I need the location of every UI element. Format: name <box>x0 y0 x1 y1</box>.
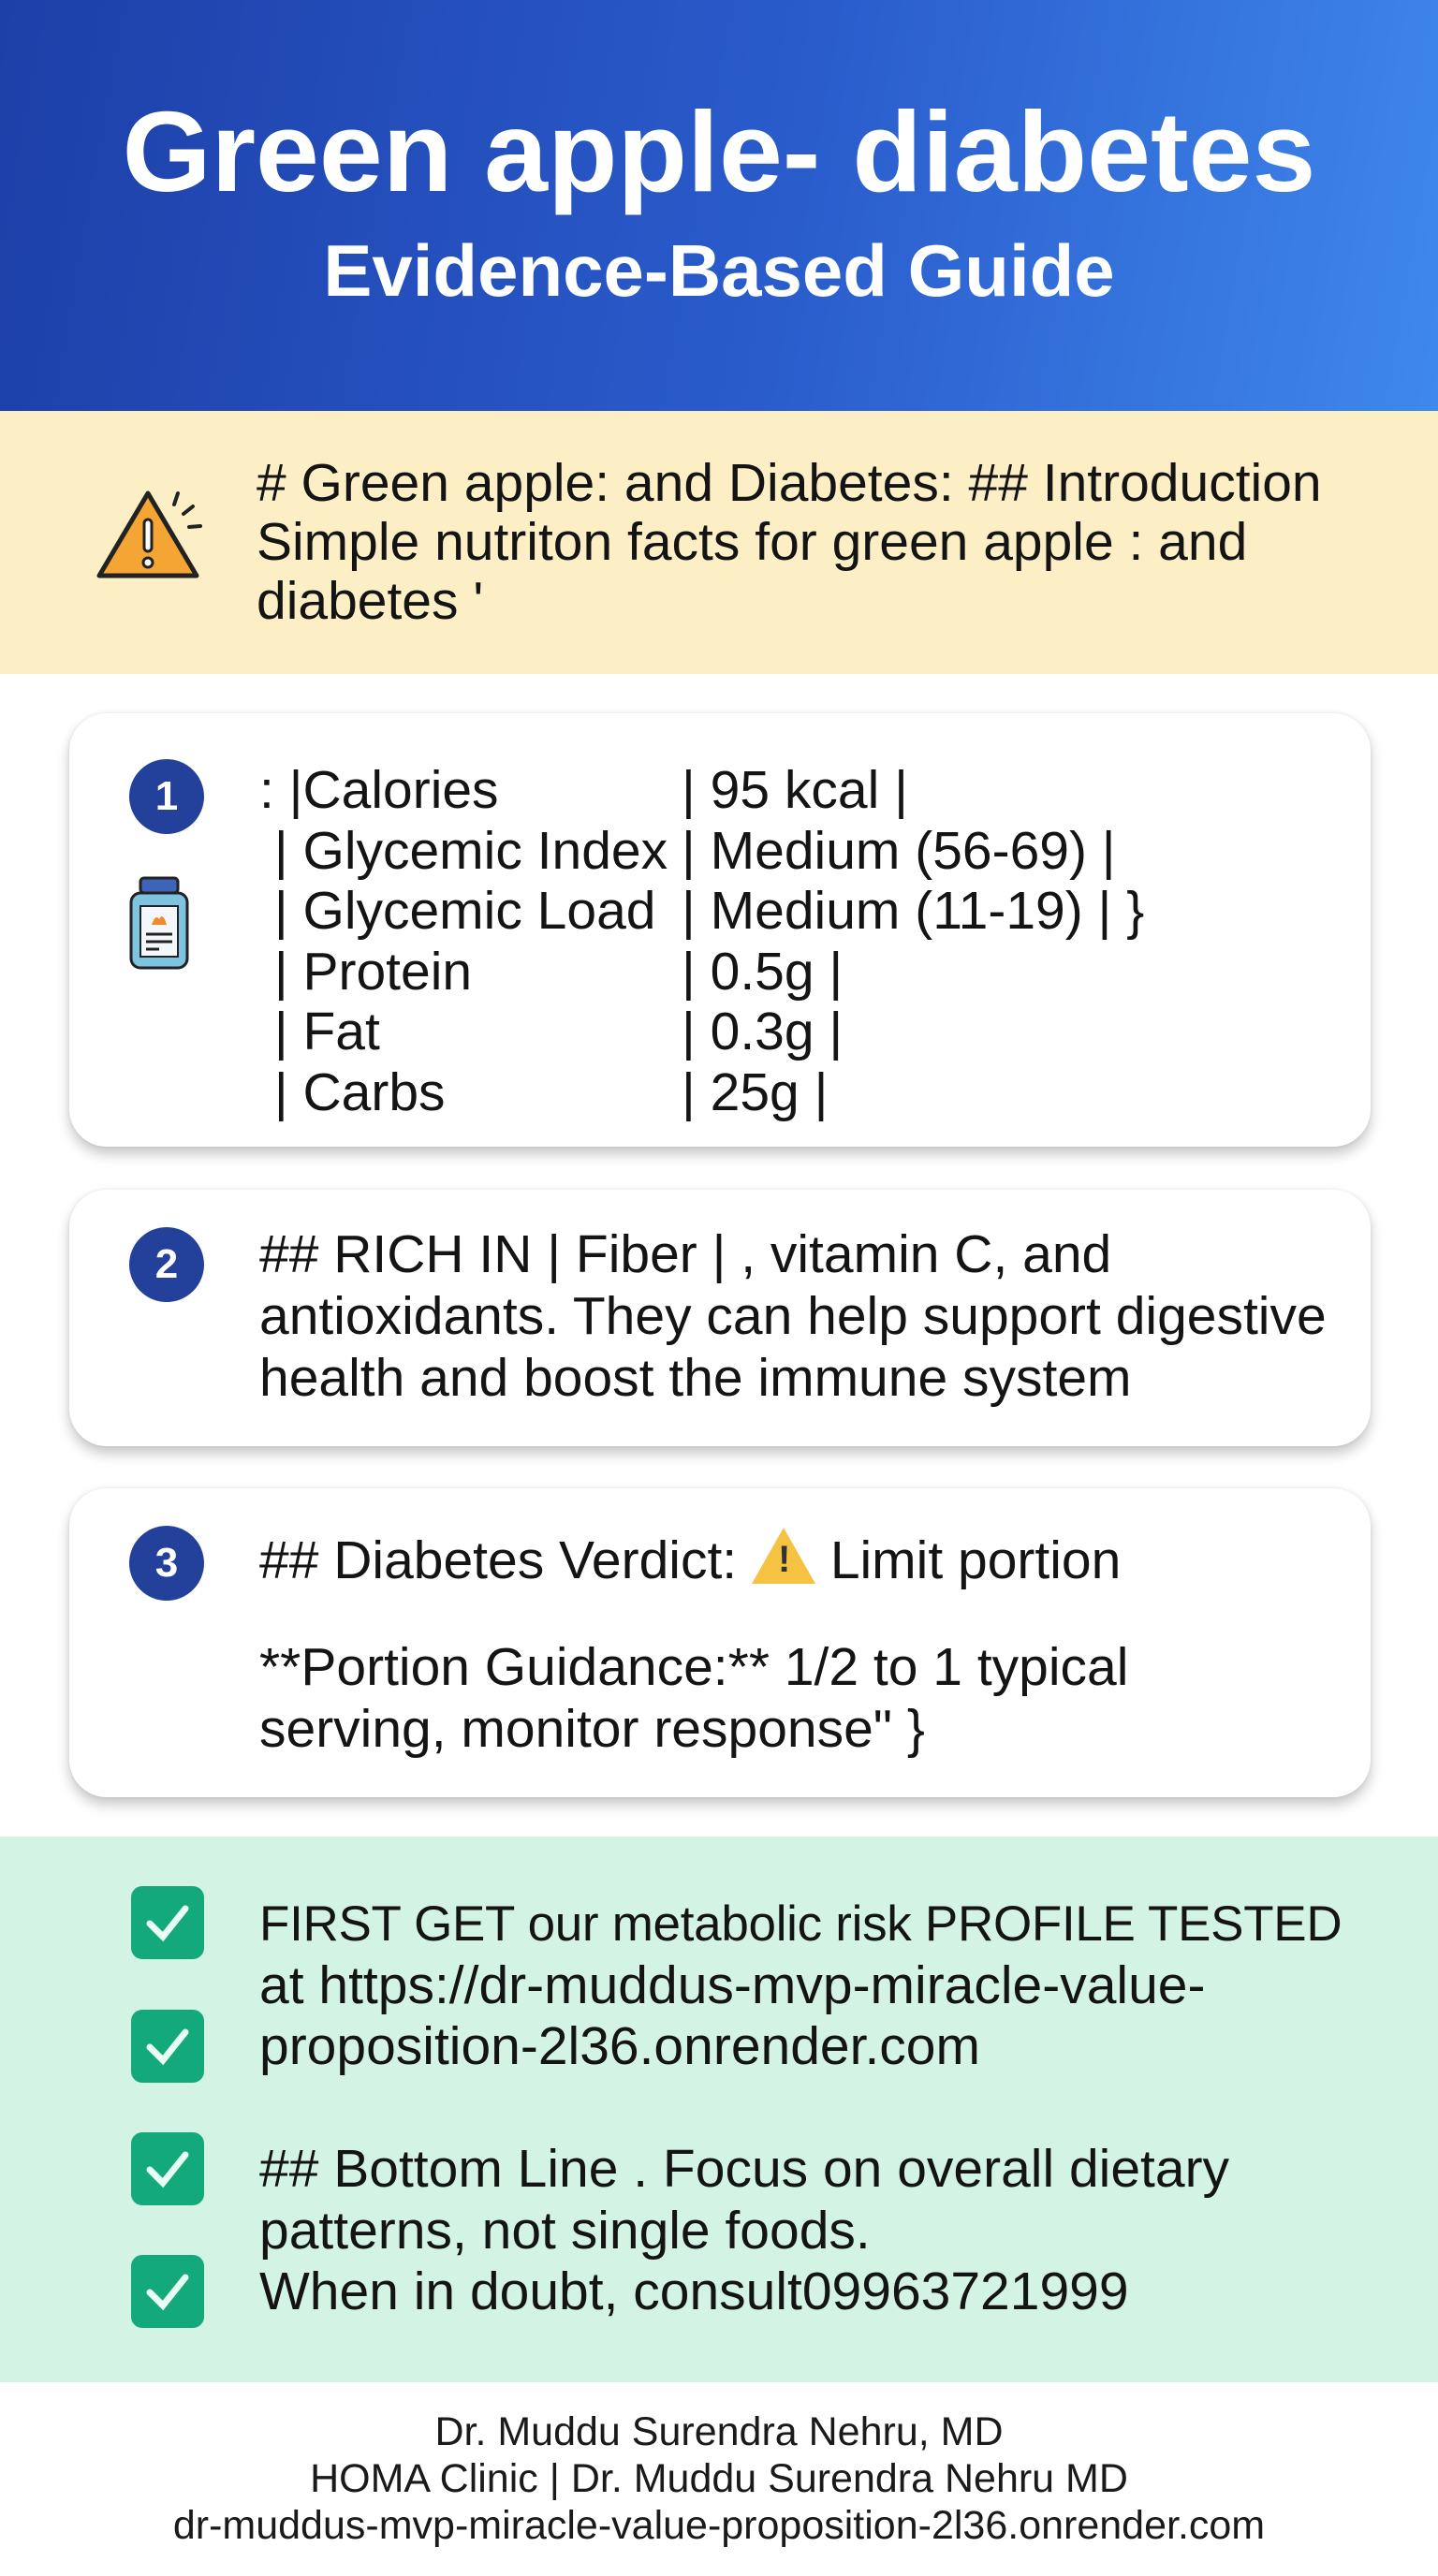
intro text <box>257 453 1322 631</box>
table column 2: | Medium (56-69) | <box>682 820 1116 880</box>
checkbox icons <box>131 1886 204 2328</box>
card 2 text: health and boost the immune system <box>259 1348 1132 1408</box>
table column 2: | 0.3g | <box>682 1002 843 1061</box>
number badge 3: 3 <box>155 1540 178 1586</box>
header banner <box>0 0 1438 411</box>
table column 1: | Glycemic Index <box>274 820 668 880</box>
action text 1: proposition-2l36.onrender.com <box>259 2016 980 2076</box>
number badge 2 <box>129 1227 204 1302</box>
portion guidance text: **Portion Guidance:** 1/2 to 1 typical <box>259 1637 1128 1697</box>
table column 1 <box>259 760 668 1121</box>
panel: card 2 rich in <box>69 1190 1371 1446</box>
table column 1: | Carbs <box>274 1061 446 1121</box>
table column 2: | Medium (11-19) | } <box>682 881 1144 941</box>
card 2 text <box>259 1224 1327 1408</box>
footer <box>173 2409 1265 2548</box>
verdict text: ## Diabetes Verdict: Limit portion <box>259 1530 1121 1590</box>
action text 2: patterns, not single foods. <box>259 2200 871 2260</box>
footer: dr-muddus-mvp-miracle-value-proposition-2l36.onrender.com <box>173 2503 1265 2548</box>
footer: Dr. Muddu Surendra Nehru, MD <box>434 2409 1004 2454</box>
number badge 2: 2 <box>155 1241 178 1287</box>
action text 1: at https://dr-muddus-mvp-miracle-value- <box>259 1954 1205 2014</box>
icon: supplement jar <box>129 876 189 970</box>
portion guidance text <box>259 1637 1128 1759</box>
title: Green apple- diabetes <box>123 88 1315 215</box>
action text 2: When in doubt, consult09963721999 <box>259 2261 1129 2321</box>
table column 2 <box>682 760 1144 1121</box>
action text 2 <box>259 2139 1229 2321</box>
intro band <box>0 411 1438 674</box>
table column 1: | Glycemic Load <box>274 881 655 941</box>
number badge 3 <box>129 1526 204 1601</box>
action text 1 <box>259 1896 1342 2076</box>
verdict text: ! <box>778 1539 790 1580</box>
portion guidance text: serving, monitor response" } <box>259 1699 925 1759</box>
table column 2: | 25g | <box>682 1061 828 1121</box>
intro text: # Green apple: and Diabetes: ## Introduction <box>257 453 1322 513</box>
footer: HOMA Clinic | Dr. Muddu Surendra Nehru MD <box>310 2456 1128 2501</box>
card 2 text: antioxidants. They can help support digestive <box>259 1286 1327 1346</box>
table column 2: | 95 kcal | <box>682 760 908 820</box>
action text 1: FIRST GET our metabolic risk PROFILE TESTED <box>259 1896 1342 1952</box>
table column 1: | Protein <box>274 942 472 1002</box>
table column 2: | 0.5g | <box>682 942 843 1002</box>
panel: nutrition table card 1 <box>69 713 1371 1147</box>
subtitle: Evidence-Based Guide <box>323 229 1115 312</box>
card 2 text: ## RICH IN | Fiber | , vitamin C, and <box>259 1224 1111 1284</box>
intro text: diabetes ' <box>257 571 483 631</box>
panel: action band <box>0 1837 1438 2382</box>
number badge 1 <box>129 759 204 834</box>
icon: warning triangle <box>97 490 202 578</box>
table column 1: : |Calories <box>259 760 499 820</box>
table column 1: | Fat <box>274 1002 380 1061</box>
panel: card 3 verdict <box>69 1488 1371 1797</box>
intro text: Simple nutriton facts for green apple : and <box>257 512 1247 572</box>
action text 2: ## Bottom Line . Focus on overall dietary <box>259 2139 1229 2199</box>
number badge 1: 1 <box>155 773 178 819</box>
